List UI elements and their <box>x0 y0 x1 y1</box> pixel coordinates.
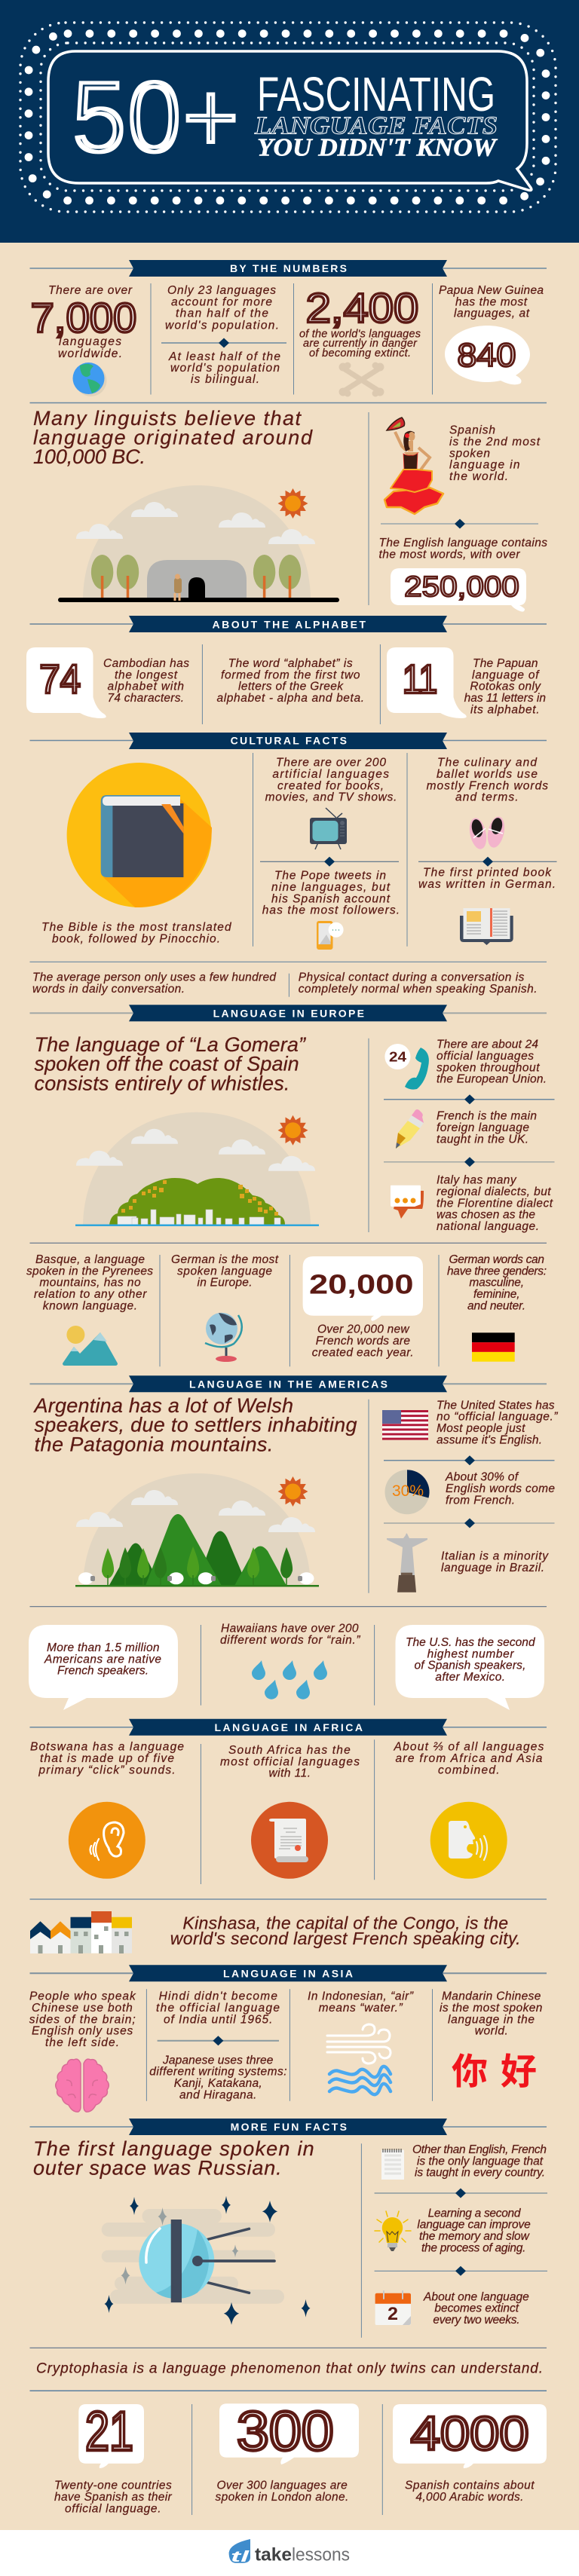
text: daily conversation <box>32 971 277 996</box>
section heading: language in Africa: LANGUAGE IN AFRICA <box>214 1721 363 1733</box>
stat: 21 countries: official language. <box>65 2502 161 2515</box>
section heading: by the numbers <box>30 260 547 277</box>
text: Mandarin: language in the <box>448 2013 535 2026</box>
text: culinary and ballet: ballet worlds use <box>437 768 538 781</box>
text: origin of word alphabet: formed from the first two <box>221 668 360 681</box>
fact: US flag: The United States has <box>437 1399 555 1412</box>
text: Hawaiian rain: different words for “rain.” <box>220 1634 360 1647</box>
section heading: language in the Americas <box>30 1375 547 1392</box>
callout: native French speakers: French speakers. <box>57 1665 149 1678</box>
fact: French taught everywhere <box>381 2143 547 2180</box>
fact: 24 official languages: 24 <box>389 1049 406 1064</box>
stat: Papua New Guinea 840: 840 <box>457 337 516 374</box>
callout: 11 letters: 11 <box>403 656 437 702</box>
fact: Italian dialects: national language. <box>437 1220 539 1233</box>
section heading: cultural facts <box>30 733 547 749</box>
stat: 2,400 endangered: of the world's languages <box>299 329 421 341</box>
stat: Papua New Guinea 840: Papua New Guinea <box>439 284 544 297</box>
panel: closing stats <box>54 2401 547 2515</box>
section heading: cultural facts: CULTURAL FACTS <box>231 735 347 747</box>
stat: 4000 Arabic words <box>393 2404 547 2504</box>
panel: language in Asia <box>29 1989 542 2112</box>
fact: Italian in Brazil with statue <box>387 1533 549 1592</box>
text: Chinese brain <box>29 1990 136 2049</box>
callout: 11 letters: language of <box>472 668 540 681</box>
text: Bible most translated: book, followed by Pinocchio. <box>52 932 220 945</box>
callout: 20,000: 20,000 <box>309 1269 413 1300</box>
text: Bible most translated <box>41 921 232 945</box>
headline: Welsh in Argentina: speakers, due to settlers inhabiting <box>35 1414 357 1436</box>
headline: Kinshasa <box>170 1913 521 1948</box>
text: 23 languages and bilingual: is bilingual. <box>191 373 259 386</box>
stat: 7,000 languages: worldwide. <box>58 347 122 360</box>
text: two thirds of languages <box>394 1741 544 1776</box>
text: origin of word alphabet <box>217 657 364 705</box>
fact: French in UK: taught in the UK. <box>437 1133 528 1146</box>
text: Indonesian air: In Indonesian, “air” <box>308 1990 414 2003</box>
chart: 30 percent pie: from French. <box>446 1494 515 1507</box>
callout: native French speakers: More than 1.5 million <box>47 1641 160 1654</box>
icon: ballet slippers <box>467 815 507 851</box>
fact: language extinction with calendar: every two weeks. <box>433 2314 520 2327</box>
stat: 300 languages in London: 300 <box>237 2401 334 2462</box>
panel: cultural facts <box>41 753 556 950</box>
fact: second language and memory: the memory and slow <box>419 2230 531 2243</box>
stat: 4000 Arabic words: 4000 <box>411 2407 529 2460</box>
fact: French taught everywhere: Other than English, French <box>412 2143 547 2156</box>
title: 50+: 50+ <box>72 60 240 174</box>
icon: scroll <box>251 1802 328 1879</box>
fact: language extinction with calendar: About one language <box>423 2290 529 2303</box>
stat: 7,000 languages: languages <box>59 335 121 348</box>
text: artificial languages: created for books, <box>277 779 384 792</box>
callout: 20,000: Over 20,000 new <box>317 1323 410 1336</box>
text: Botswana clicks <box>30 1741 184 1776</box>
logo: takelessons: tl <box>231 2549 250 2565</box>
text: German genders <box>447 1253 547 1312</box>
stat: 4000 Arabic words: Spanish contains about <box>405 2480 535 2492</box>
headline: Welsh in Argentina <box>33 1394 357 1455</box>
headline: La Gomera: spoken off the coast of Spain <box>35 1053 299 1075</box>
stat: 300 languages in London: Over 300 languages are <box>217 2480 348 2492</box>
icon: television <box>310 808 347 849</box>
divider with diamond <box>260 857 399 867</box>
section heading: language in the Americas: LANGUAGE IN THE AMERICAS <box>189 1378 388 1390</box>
icon: ear <box>69 1802 146 1879</box>
text: artificial languages <box>265 757 397 804</box>
text: Hindi <box>156 1990 280 2026</box>
text: physical contact <box>299 971 537 996</box>
text: Mandarin <box>440 1990 542 2038</box>
panel: Americas lower row <box>29 1623 544 1710</box>
headline: origin of language <box>33 407 313 468</box>
fact: 24 official languages: the European Union. <box>437 1073 547 1086</box>
text: Botswana clicks: that is made up of five <box>40 1752 174 1765</box>
icon: wind <box>327 2024 391 2064</box>
header panel <box>0 0 579 243</box>
fact: Italian dialects <box>391 1174 553 1233</box>
text: culinary and ballet: mostly French words <box>427 779 548 792</box>
section heading: language in Europe: LANGUAGE IN EUROPE <box>213 1008 364 1020</box>
illustration: Patagonia mountains <box>75 1473 319 1587</box>
chart: 30 percent pie: About 30% of <box>445 1471 519 1484</box>
headline: origin of language: language originated around <box>33 426 313 448</box>
panel: Europe lower row <box>26 1253 547 1366</box>
section heading: more fun facts: MORE FUN FACTS <box>231 2121 347 2133</box>
text: two thirds of languages: About ⅔ of all languages <box>394 1741 544 1754</box>
stat: Papua New Guinea 840: has the most <box>455 295 528 308</box>
callout: native French speakers: Americans are native <box>44 1653 161 1666</box>
text: German most spoken: spoken language <box>177 1265 272 1277</box>
text: Bible most translated: The Bible is the most translated <box>41 921 232 934</box>
illustration: cave scene <box>58 485 339 602</box>
stat: 2,400 endangered: of becoming extinct. <box>309 347 411 359</box>
callout: native French speakers <box>29 1625 178 1710</box>
headline: Russian in space: The first language spoken in <box>33 2137 314 2160</box>
fact: French in UK: French is the main <box>437 1110 537 1123</box>
text: origin of word alphabet: letters of the Greek <box>238 681 344 693</box>
fact: Italian dialects: Italy has many <box>437 1174 517 1187</box>
text: South Africa <box>220 1744 360 1780</box>
fact: 24 official languages <box>384 1039 547 1090</box>
text: two thirds of languages: combined. <box>438 1764 500 1776</box>
chinese hello: 你好 <box>452 2052 537 2092</box>
text: German genders: and neuter. <box>467 1299 525 1312</box>
text: Indonesian air: means “water.” <box>319 2002 403 2015</box>
text: Hawaiian rain <box>220 1623 360 1647</box>
callout: Spanish speakers in the US: of Spanish speakers, <box>415 1660 525 1672</box>
section heading: about the alphabet: ABOUT THE ALPHABET <box>213 619 366 631</box>
stat: 7,000 languages <box>31 284 136 360</box>
text: Spanish second most spoken <box>449 424 541 483</box>
text: cryptophasia: Cryptophasia is a language phenomenon that only twins can understand. <box>36 2360 543 2376</box>
section heading: by the numbers: BY THE NUMBERS <box>230 262 347 274</box>
section heading: language in Europe <box>30 1005 547 1021</box>
section heading: language in Asia <box>30 1965 547 1981</box>
text: artificial languages: artificial languages <box>272 768 389 781</box>
text: Botswana clicks: primary “click” sounds. <box>38 1764 176 1776</box>
callout: 74 characters <box>26 647 189 718</box>
text: Basque: known language. <box>43 1299 137 1312</box>
text: Mandarin: is the most spoken <box>440 2002 542 2015</box>
title: fascinating: FASCINATING <box>257 67 495 121</box>
icon: crossed bones <box>339 363 384 396</box>
fact: language extinction with calendar: 2 <box>388 2304 398 2324</box>
divider with diamond <box>375 2189 547 2198</box>
stat: Papua New Guinea 840 <box>439 284 544 384</box>
stat: 21 countries: 21 <box>85 2401 133 2462</box>
text: German genders: German words can <box>449 1253 544 1266</box>
text: Pope tweets: has the most followers. <box>262 904 400 917</box>
chart: 30 percent pie: 30% <box>392 1482 424 1500</box>
fact: French in UK <box>396 1109 537 1149</box>
text: 23 languages and bilingual: world's population <box>170 362 280 375</box>
divider with diamond <box>384 1094 555 1104</box>
headline: Kinshasa: world's second largest French speaking city. <box>170 1929 521 1948</box>
chart: 30 percent pie <box>384 1470 555 1514</box>
text: South Africa: with 11. <box>268 1767 311 1780</box>
callout: Spanish speakers in the US: highest number <box>427 1647 514 1660</box>
callout: 74 characters: 74 <box>39 656 81 702</box>
text: Basque: Basque, a language <box>35 1253 145 1266</box>
title: language facts: LANGUAGE FACTS <box>254 112 498 140</box>
callout: Spanish speakers in the US: after Mexico. <box>435 1671 505 1684</box>
logo: takelessons: lessons <box>292 2545 350 2565</box>
text: first printed book: The first printed book <box>423 867 552 880</box>
icon: rain drops <box>252 1660 327 1699</box>
fact: Italian dialects: the Florentine dialect <box>437 1197 553 1210</box>
fact: language extinction with calendar: becomes extinct <box>434 2302 519 2315</box>
text: Chinese brain: People who speak <box>29 1990 136 2003</box>
fact: 24 official languages: There are about 24 <box>437 1039 538 1051</box>
text: origin of word alphabet: alphabet - alpha and beta. <box>217 692 364 705</box>
text: Chinese brain: Chinese use both <box>32 2002 133 2015</box>
text: first printed book: was written in German. <box>418 878 556 891</box>
headline: Welsh in Argentina: the Patagonia mountains. <box>35 1433 273 1455</box>
text: 23 languages and bilingual: At least half of the <box>168 350 280 363</box>
text: culinary and ballet: The culinary and <box>437 757 538 769</box>
text: daily conversation: words in daily conversation. <box>32 983 185 996</box>
fact: Italian dialects: was chosen as the <box>437 1209 535 1222</box>
fact: second language and memory <box>375 2207 531 2254</box>
divider with diamond <box>384 1455 555 1465</box>
icon: water waves <box>329 2067 391 2094</box>
callout: 74 characters: Cambodian has <box>103 657 189 670</box>
callout: 11 letters: its alphabet. <box>470 703 540 716</box>
text: Japanese writing systems: Kanji, Katakana, <box>174 2077 262 2090</box>
text: South Africa: most official languages <box>220 1755 360 1768</box>
headline: Russian in space <box>33 2137 314 2180</box>
text: Spanish second most spoken: is the 2nd most <box>449 436 541 448</box>
headline: origin of language: Many linguists believe that <box>33 407 302 430</box>
headline: Kinshasa: Kinshasa, the capital of the Congo, is the <box>182 1913 508 1932</box>
text: Basque: relation to any other <box>34 1288 147 1301</box>
text: two thirds of languages: are from Africa and Asia <box>395 1752 543 1765</box>
section heading: more fun facts <box>30 2119 547 2135</box>
text: Basque <box>26 1253 153 1312</box>
stat: English 250,000 words <box>378 537 547 612</box>
panel: language in Africa <box>30 1739 544 1884</box>
text: Botswana clicks: Botswana has a language <box>30 1741 184 1754</box>
title: you didn't know: YOU DIDN'T KNOW <box>257 133 498 161</box>
panel: about the alphabet <box>26 644 546 724</box>
divider with diamond <box>418 857 556 867</box>
text: Hawaiian rain: Hawaiians have over 200 <box>221 1623 359 1635</box>
text: Hindi: of India until 1965. <box>164 2013 272 2026</box>
callout: 20,000: French words are <box>316 1335 410 1348</box>
illustration: satellite in space <box>102 2196 310 2325</box>
footer <box>0 2530 579 2576</box>
stat: English 250,000 words: the most words, with over <box>378 548 520 561</box>
icon: desk globe <box>205 1313 242 1362</box>
text: Japanese writing systems: different writing systems: <box>149 2066 286 2079</box>
callout: 11 letters: The Papuan <box>473 657 538 670</box>
text: origin of word alphabet: The word “alphabet” is <box>228 657 353 670</box>
text: German genders: feminine, <box>473 1288 520 1301</box>
callout: 11 letters: Rotokas only <box>470 681 541 693</box>
fact: 24 official languages: official languages <box>437 1050 534 1063</box>
text: South Africa: South Africa has the <box>228 1744 351 1757</box>
text: Spanish second most spoken: the world. <box>449 470 508 483</box>
fact: US flag: no “official language.” <box>437 1411 558 1424</box>
text: Basque: spoken in the Pyrenees <box>26 1265 153 1277</box>
stat: 2,400 endangered: are currently in danger <box>303 338 418 350</box>
text: 23 languages and bilingual: Only 23 languages <box>167 284 276 297</box>
text: physical contact: completely normal when speaking Spanish. <box>299 983 537 996</box>
fact: second language and memory: the process of aging. <box>421 2241 525 2254</box>
stat: 300 languages in London <box>216 2401 359 2504</box>
fact: US flag: Most people just <box>437 1422 525 1435</box>
icon: speaking head <box>430 1802 507 1879</box>
section heading: language in Africa <box>30 1719 547 1736</box>
text: first printed book <box>418 867 556 891</box>
callout: 74 characters: alphabet with <box>107 681 184 693</box>
text: German genders: have three genders: <box>447 1265 547 1277</box>
divider with diamond <box>158 2036 279 2045</box>
text: artificial languages: There are over 200 <box>276 757 386 769</box>
divider with diamond <box>384 1518 555 1528</box>
text: Spanish second most spoken: Spanish <box>449 424 495 437</box>
stat: 4000 Arabic words: 4,000 Arabic words. <box>415 2491 523 2504</box>
text: German most spoken <box>171 1253 279 1290</box>
stat: 7,000 languages: There are over <box>48 284 133 297</box>
text: Chinese brain: the left side. <box>45 2036 119 2049</box>
fact: US flag: assume it's English. <box>437 1433 542 1446</box>
text: Japanese writing systems: Japanese uses three <box>162 2054 274 2067</box>
text: 23 languages and bilingual <box>161 284 286 386</box>
headline: Russian in space: outer space was Russian. <box>33 2157 282 2180</box>
text: Pope tweets: nine languages, but <box>271 881 391 894</box>
icon: Kinshasa houses <box>30 1911 132 1953</box>
stat: 2,400 endangered <box>299 284 421 359</box>
fact: 24 official languages: spoken throughout <box>437 1061 540 1074</box>
divider with diamond <box>375 2266 547 2276</box>
text: Pope tweets <box>262 870 400 917</box>
divider with diamond <box>384 1157 555 1167</box>
icon: brain <box>56 2059 109 2112</box>
speech bubble frame <box>48 51 532 191</box>
text: Mandarin: world. <box>475 2025 508 2038</box>
icon: phone with chat <box>317 921 344 950</box>
text: Hindi: Hindi didn't become <box>159 1990 277 2003</box>
stat: 7,000 languages: 7,000 <box>31 294 136 341</box>
fact: French in UK: foreign language <box>437 1121 529 1134</box>
fact: Italian in Brazil with statue: language in Brazil. <box>441 1562 544 1574</box>
stat: 21 countries <box>54 2401 173 2515</box>
panel: by the numbers <box>31 283 544 396</box>
callout: 11 letters <box>387 647 546 718</box>
text: Japanese writing systems <box>149 2054 286 2101</box>
headline: La Gomera: consists entirely of whistles. <box>35 1072 290 1094</box>
headline: La Gomera <box>35 1033 306 1094</box>
text: Chinese brain: sides of the brain; <box>29 2013 136 2026</box>
text: German genders: masculine, <box>469 1277 524 1290</box>
callout: 74 characters: 74 characters. <box>107 692 184 705</box>
icon: mountains <box>63 1326 118 1366</box>
text: Basque: mountains, has no <box>39 1277 141 1290</box>
divider with diamond <box>381 519 538 529</box>
icon: bible book <box>67 763 212 907</box>
section heading: about the alphabet <box>30 616 547 632</box>
callout: 20,000: created each year. <box>312 1346 413 1359</box>
headline: La Gomera: The language of “La Gomera” <box>35 1033 306 1056</box>
stat: 21 countries: Twenty-one countries <box>54 2480 172 2492</box>
fact: second language and memory: Learning a second <box>428 2207 522 2220</box>
stat: English 250,000 words: The English language contains <box>378 537 547 549</box>
fact: Italian dialects: regional dialects, but <box>437 1186 551 1198</box>
text: Mandarin: Mandarin Chinese <box>442 1990 541 2003</box>
icon: flamenco dancer <box>384 418 443 514</box>
fact: Italian in Brazil with statue: Italian is a minority <box>441 1550 549 1563</box>
fact: language extinction with calendar <box>375 2290 529 2327</box>
headline: Welsh in Argentina: Argentina has a lot of Welsh <box>33 1394 293 1417</box>
text: German most spoken: German is the most <box>171 1253 279 1266</box>
text: 23 languages and bilingual: account for more <box>171 295 272 308</box>
section heading: language in Asia: LANGUAGE IN ASIA <box>223 1967 353 1979</box>
text: German most spoken: in Europe. <box>198 1277 252 1290</box>
fact: US flag <box>382 1399 558 1446</box>
headline: origin of language: 100,000 BC. <box>33 445 146 468</box>
stat: 21 countries: have Spanish as their <box>54 2491 173 2504</box>
text: culinary and ballet: and terms. <box>455 791 519 804</box>
icon: earth <box>72 363 107 396</box>
chart: 30 percent pie: English words come <box>446 1482 555 1495</box>
callout: Spanish speakers in the US: The U.S. has the second <box>406 1636 536 1649</box>
text: artificial languages: movies, and TV shows. <box>265 791 397 804</box>
text: Spanish second most spoken: spoken <box>449 447 490 460</box>
callout: 11 letters: has 11 letters in <box>464 692 546 705</box>
stat: 300 languages in London: spoken in London alone. <box>216 2491 348 2504</box>
text: Pope tweets: his Spanish account <box>271 892 391 905</box>
text: Hindi: the official language <box>156 2002 280 2015</box>
callout: Spanish speakers in the US <box>395 1625 544 1710</box>
callout: 74 characters: the longest <box>115 668 178 681</box>
icon: open book <box>460 908 513 945</box>
illustration: La Gomera island <box>75 1112 319 1226</box>
text: daily conversation: The average person only uses a few hundred <box>32 971 277 984</box>
text: Indonesian air <box>308 1990 414 2015</box>
stat: Papua New Guinea 840: languages, at <box>454 307 530 320</box>
logo: takelessons <box>229 2539 350 2565</box>
text: Japanese writing systems: and Hiragana. <box>179 2088 256 2101</box>
text: culinary and ballet <box>427 757 548 804</box>
text: 23 languages and bilingual: than half of the <box>176 307 268 320</box>
stat: English 250,000 words: 250,000 <box>404 571 519 603</box>
fact: second language and memory: language can improve <box>417 2219 531 2232</box>
text: Pope tweets: The Pope tweets in <box>274 870 386 883</box>
stat: 2,400 endangered: 2,400 <box>306 284 418 331</box>
text: Spanish second most spoken: language in <box>449 459 520 472</box>
text: Chinese brain: English only uses <box>32 2025 133 2038</box>
text: 23 languages and bilingual: world's population. <box>165 319 279 332</box>
logo: takelessons: take <box>255 2545 292 2565</box>
icon: German flag <box>472 1332 515 1362</box>
text: physical contact: Physical contact during a conversation is <box>299 971 525 984</box>
fact: French taught everywhere: is taught in every country. <box>415 2167 545 2180</box>
callout: 20,000 <box>303 1256 423 1359</box>
fact: French taught everywhere: is the only language that <box>417 2155 544 2168</box>
